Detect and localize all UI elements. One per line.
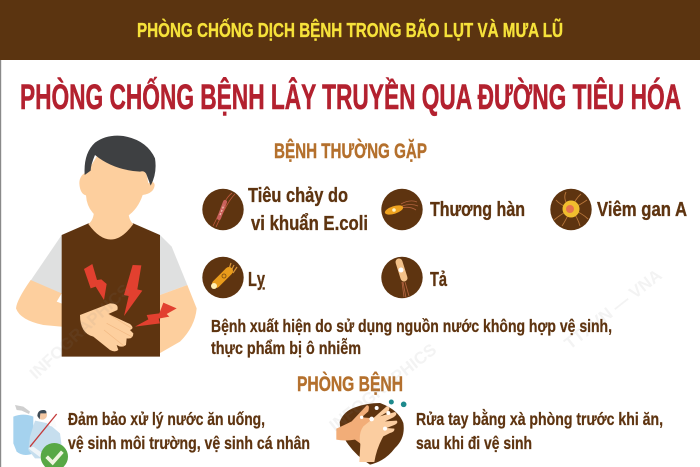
label: Tả — [430, 269, 448, 291]
icon: cholera bacteria — [381, 257, 423, 298]
watermarks — [26, 265, 665, 435]
heading: prevention: PHÒNG BỆNH — [297, 372, 403, 396]
icon: typhoid bacteria — [381, 189, 423, 230]
header band — [0, 0, 700, 60]
label: Tiêu chảy do — [248, 185, 348, 207]
icon: E. coli bacteria — [202, 189, 244, 230]
disease: dysentery — [202, 257, 266, 298]
disease: cholera — [381, 257, 448, 298]
heading: common diseases: BỆNH THƯỜNG GẶP — [274, 139, 427, 163]
header title: PHÒNG CHỐNG DỊCH BỆNH TRONG BÃO LỤT VÀ MƯA LŨ — [137, 18, 563, 42]
label: Lỵ — [248, 269, 266, 291]
cause text: Bệnh xuất hiện do sử dụng nguồn nước không hợp vệ sinh, — [211, 316, 612, 336]
icon: hepatitis A virus — [550, 189, 592, 230]
text: Đảm bảo xử lý nước ăn uống, — [68, 409, 265, 429]
cause text — [211, 316, 612, 358]
watermarks: TTXVN — VNA — [561, 265, 665, 353]
icon: water tank, cleaner and check mark — [13, 405, 68, 467]
illustration: man with stomach pain — [16, 136, 197, 357]
prevention: hand washing — [336, 400, 663, 465]
disease: E. coli: vi khuẩn E.coli — [251, 213, 368, 235]
watermarks: INFOGRAPHICS — [326, 340, 440, 435]
label: Thương hàn — [430, 199, 525, 221]
icon: dysentery bacteria — [202, 257, 244, 298]
watermarks: INFOGRAPHICS — [26, 280, 134, 383]
prevention: clean water and hygiene — [13, 405, 310, 467]
prevention: clean water and hygiene: vệ sinh môi trường, vệ sinh cá nhân — [68, 433, 310, 453]
disease: hepatitis A — [550, 189, 687, 230]
cause text: thực phẩm bị ô nhiễm — [211, 337, 361, 358]
disease: E. coli — [202, 185, 368, 235]
disease: typhoid — [381, 189, 525, 230]
icon: washing hands — [336, 400, 406, 465]
prevention: hand washing: sau khi đi vệ sinh — [416, 433, 532, 453]
